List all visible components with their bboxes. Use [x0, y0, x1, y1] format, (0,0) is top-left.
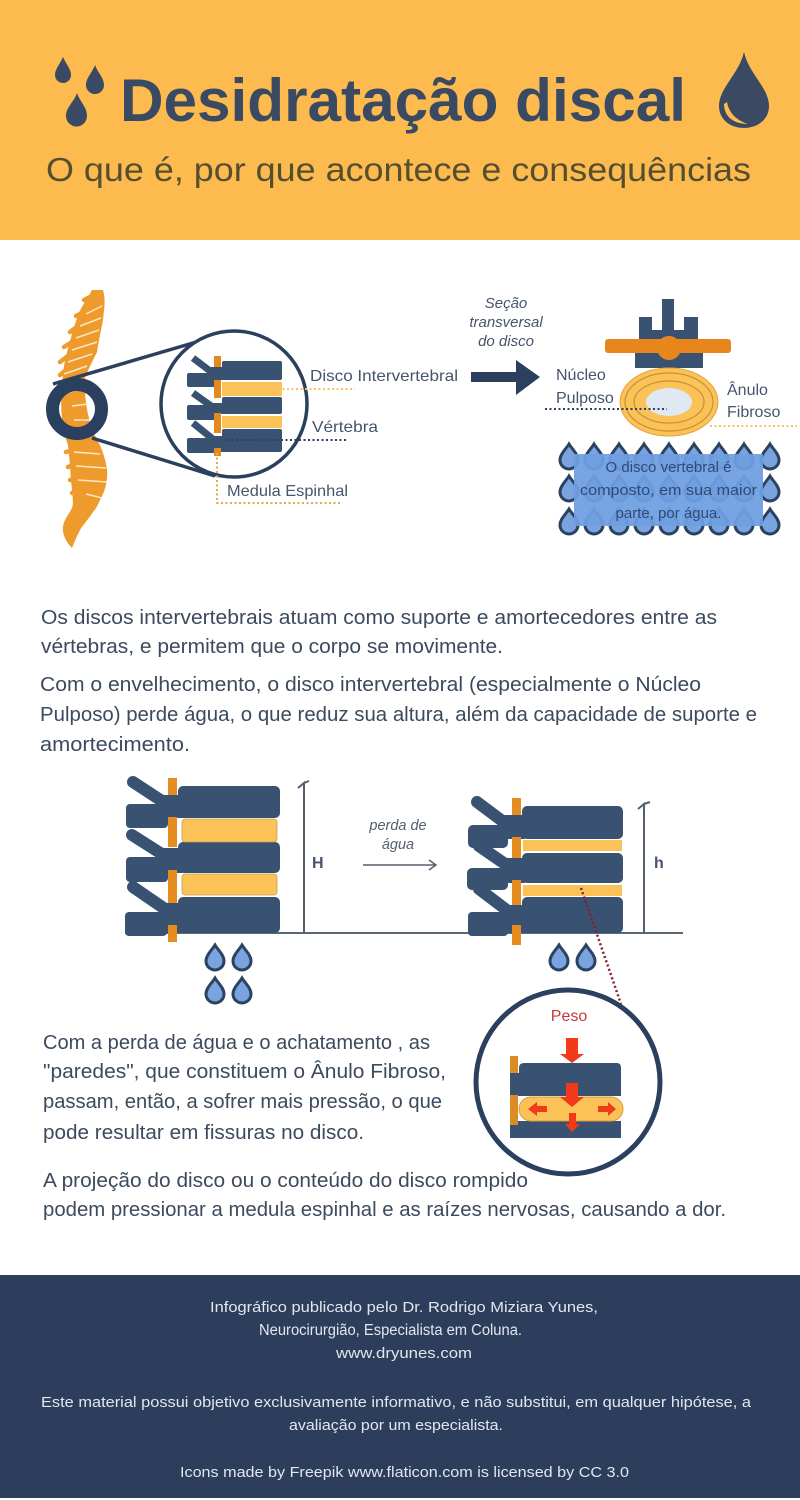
water callout: composto, em sua maior [580, 482, 757, 499]
panel: spine anatomy [52, 290, 458, 548]
water callout [574, 454, 763, 526]
credits: www.dryunes.com [335, 1345, 472, 1362]
vertebrae in circle [187, 356, 282, 456]
leader lines [217, 389, 355, 503]
water callout: O disco vertebral é [606, 459, 731, 476]
text block: consequence: A projeção do disco ou o conteúdo do disco rompido [43, 1170, 528, 1192]
label: peso: Peso [551, 1008, 587, 1025]
drops reduced [550, 945, 595, 970]
spine illustration [60, 290, 107, 548]
magnifier ring [52, 384, 102, 434]
text block: intro: Pulposo) perde água, o que reduz sua altura, além da capacidade de suporte e [40, 704, 757, 726]
icon: three small drops [55, 57, 104, 126]
disclaimer [41, 1394, 752, 1434]
water callout: parte, por água. [616, 505, 721, 522]
label: seção transversal: do disco [478, 333, 534, 350]
magnifier lines [53, 338, 215, 476]
label: vértebra: Vértebra [312, 419, 378, 436]
pressure diagram [476, 990, 660, 1174]
disclaimer: Este material possui objetivo exclusivamente informativo, e não substitui, em qualquer hipótese, a [41, 1394, 752, 1411]
text block: pressure: passam, então, a sofrer mais pressão, o que [43, 1091, 442, 1113]
text block: pressure [43, 1032, 446, 1144]
vertebra cross-section [605, 299, 731, 436]
text block: consequence: podem pressionar a medula espinhal e as raízes nervosas, causando a dor. [43, 1199, 726, 1221]
panel: cross-section [469, 295, 797, 534]
label: ânulo fibroso: Ânulo [727, 380, 768, 399]
credits: Infográfico publicado pelo Dr. Rodrigo Miziara Yunes, [210, 1299, 598, 1316]
credits: Neurocirurgião, Especialista em Coluna. [259, 1322, 522, 1339]
text block: pressure: Com a perda de água e o achatamento , as [43, 1032, 430, 1054]
label: ânulo fibroso [727, 380, 780, 421]
arrow [363, 860, 436, 870]
label: seção transversal [469, 295, 543, 350]
compressed disc [510, 1056, 623, 1138]
text block: intro: Os discos intervertebrais atuam como suporte e amortecedores entre as [41, 607, 717, 629]
label: perda de água: perda de [368, 818, 427, 834]
text block: consequence [43, 1170, 726, 1221]
title: Desidratação discal [120, 67, 686, 134]
label: núcleo pulposo: Núcleo [556, 367, 606, 384]
label: ânulo fibroso: Fibroso [727, 404, 780, 421]
label: seção transversal: Seção [485, 295, 527, 312]
label: núcleo pulposo [556, 367, 614, 407]
drops healthy [206, 945, 251, 1003]
label: disco intervertebral: Disco Intervertebral [310, 368, 458, 385]
text block: intro: Com o envelhecimento, o disco intervertebral (especialmente o Núcleo [40, 674, 701, 696]
arrow [471, 360, 540, 395]
label: medula espinhal: Medula Espinhal [227, 483, 348, 500]
footer [0, 1275, 800, 1498]
chart: height comparison [125, 778, 683, 1004]
text block: intro: vértebras, e permitem que o corpo se movimente. [41, 636, 503, 658]
axis H: H [312, 855, 324, 872]
axis h: h [654, 855, 664, 872]
icon attribution: Icons made by Freepik www.flaticon.com is licensed by CC 3.0 [180, 1464, 629, 1481]
label: perda de água [368, 818, 427, 853]
icon: large drop [719, 52, 769, 128]
leader lines [545, 409, 797, 426]
text block: intro: amortecimento. [40, 734, 190, 756]
red arrows [528, 1038, 616, 1132]
healthy spine stack [125, 778, 280, 942]
ground line [125, 932, 683, 934]
axis H [298, 781, 324, 933]
subtitle: O que é, por que acontece e consequências [46, 151, 751, 188]
text block: pressure: "paredes", que constituem o Ânulo Fibroso, [43, 1060, 446, 1083]
header banner [0, 0, 800, 240]
disclaimer: avaliação por um especialista. [289, 1417, 503, 1434]
dehydrated spine stack [467, 798, 623, 945]
credits [210, 1299, 598, 1362]
dotted connector [581, 888, 621, 1004]
zoom circle [161, 331, 307, 477]
label: seção transversal: transversal [469, 314, 543, 331]
label: perda de água: água [382, 837, 414, 853]
text block: intro [40, 607, 757, 756]
label: núcleo pulposo: Pulposo [556, 390, 614, 407]
axis h [638, 802, 664, 933]
text block: pressure: pode resultar em fissuras no disco. [43, 1122, 364, 1144]
water drops [560, 444, 779, 534]
